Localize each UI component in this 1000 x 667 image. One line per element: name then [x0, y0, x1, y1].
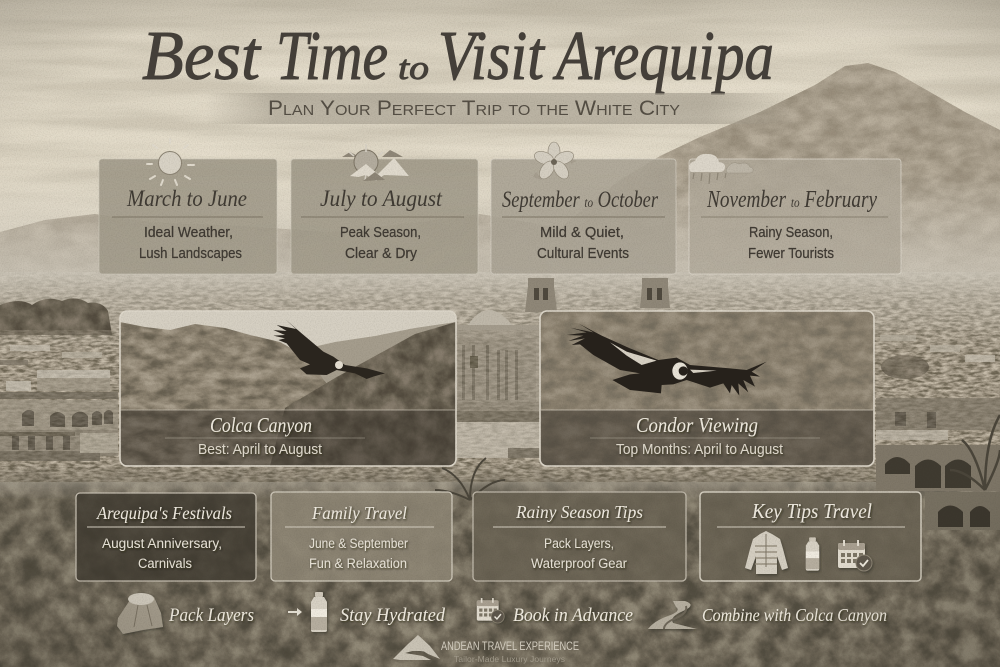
background: El Misti volcano and hills	[0, 63, 1000, 300]
text: rainy gear: Waterproof Gear	[531, 556, 627, 571]
heading: July to August: July to August	[320, 186, 443, 211]
title: Visit	[438, 18, 545, 95]
text: mild and quiet: Mild & Quiet,	[540, 224, 624, 241]
icon: flower	[533, 142, 576, 182]
icon: jacket pile	[117, 593, 163, 634]
text: family months: June & September	[309, 536, 408, 551]
icon: condor in flight	[567, 323, 767, 396]
text: rainy season: Rainy Season,	[749, 224, 833, 241]
text: peak season	[340, 224, 421, 262]
heading: festivals: Arequipa's Festivals	[96, 503, 232, 523]
text: peak season: Clear & Dry	[345, 245, 417, 262]
text: peak season: Peak Season,	[340, 224, 421, 241]
icon: jacket	[745, 531, 788, 574]
text: family months	[309, 536, 408, 571]
tip: stay hydrated: Stay Hydrated	[340, 605, 445, 626]
subtitle band: Plan Your Perfect Trip to the White City	[268, 97, 680, 120]
left buildings and arcade	[0, 345, 118, 461]
icon: water bottle	[311, 592, 327, 632]
logo: Andean Travel Experience	[393, 635, 579, 664]
heading: March to June: March to June	[126, 186, 247, 211]
background: right arcade and palm	[435, 415, 1000, 530]
panel: September to October	[491, 142, 676, 274]
text: ideal weather: Lush Landscapes	[139, 245, 242, 262]
panel: July to August	[291, 144, 478, 274]
icon: sun	[147, 139, 194, 185]
icon: calendar	[838, 540, 872, 571]
title: Time	[276, 18, 388, 95]
heading: Condor Viewing: Condor Viewing	[636, 413, 758, 437]
background: city of Arequipa	[0, 272, 1000, 482]
text: festival dates: August Anniversary,	[102, 536, 222, 551]
title: Best	[142, 18, 262, 95]
tip: pack layers	[117, 593, 254, 634]
tip: stay hydrated	[288, 592, 445, 632]
tip: pack layers: Pack Layers	[168, 605, 254, 626]
text: festival dates: Carnivals	[138, 556, 192, 571]
text: rainy season	[748, 224, 834, 262]
logo: Andean Travel Experience: ANDEAN TRAVEL EXPERIENCE	[441, 639, 579, 653]
icon: winding road	[648, 601, 697, 629]
panel: November to February	[689, 154, 901, 274]
text: mild and quiet	[537, 224, 629, 262]
tip: combine with Colca Canyon	[648, 601, 887, 629]
heading: September to October: September to October	[502, 187, 659, 212]
icon: mountain mark	[393, 635, 440, 660]
text: ideal weather: Ideal Weather,	[144, 224, 233, 241]
icon: condor in flight	[273, 319, 385, 379]
arrow	[288, 608, 302, 616]
panel: Family Travel	[271, 492, 452, 581]
panel: Rainy Season Tips	[473, 492, 686, 581]
heading: key tips: Key Tips Travel	[751, 499, 872, 523]
icon: condor ruff	[335, 361, 343, 369]
panel: March to June	[99, 139, 277, 274]
background: sky	[0, 0, 1000, 300]
tip: combine with Colca Canyon: Combine with Colca Canyon	[702, 605, 887, 625]
panel: Condor Viewing	[540, 311, 874, 466]
title: to	[398, 50, 429, 87]
icon: water bottle	[806, 537, 819, 571]
text: rainy gear: Pack Layers,	[544, 536, 614, 551]
left trees	[0, 298, 112, 335]
tip: book in advance: Book in Advance	[513, 605, 633, 626]
icon: rain clouds	[689, 154, 753, 184]
icon: calendar	[477, 598, 504, 623]
text: rainy season: Fewer Tourists	[748, 245, 834, 262]
heading: rainy season tips: Rainy Season Tips	[515, 502, 643, 522]
text: festival dates	[102, 536, 222, 571]
church, towers and plaza	[456, 278, 670, 458]
heading: family travel: Family Travel	[311, 503, 407, 523]
text: ideal weather	[139, 224, 242, 262]
panel: Arequipa's Festivals	[76, 493, 256, 581]
heading: Colca Canyon: Colca Canyon	[210, 413, 312, 437]
icon: sun and mountains	[342, 144, 409, 181]
text: rainy gear	[531, 536, 627, 571]
text: top months: Top Months: April to August	[616, 442, 783, 458]
title	[142, 18, 774, 95]
text: best months: Best: April to August	[198, 442, 322, 458]
heading: November to February: November to February	[706, 187, 877, 213]
text: mild and quiet: Cultural Events	[537, 245, 629, 262]
background: foreground vegetation	[0, 462, 1000, 667]
tip: book in advance	[477, 598, 633, 626]
text: family months: Fun & Relaxation	[309, 556, 407, 571]
subtitle band	[205, 93, 795, 124]
title: Arequipa	[553, 18, 774, 95]
right city	[876, 335, 1000, 440]
panel: Colca Canyon	[120, 311, 456, 466]
logo: Andean Travel Experience: Tailor-Made Luxury Journeys	[454, 654, 565, 664]
panel: Key Tips Travel	[700, 492, 921, 581]
